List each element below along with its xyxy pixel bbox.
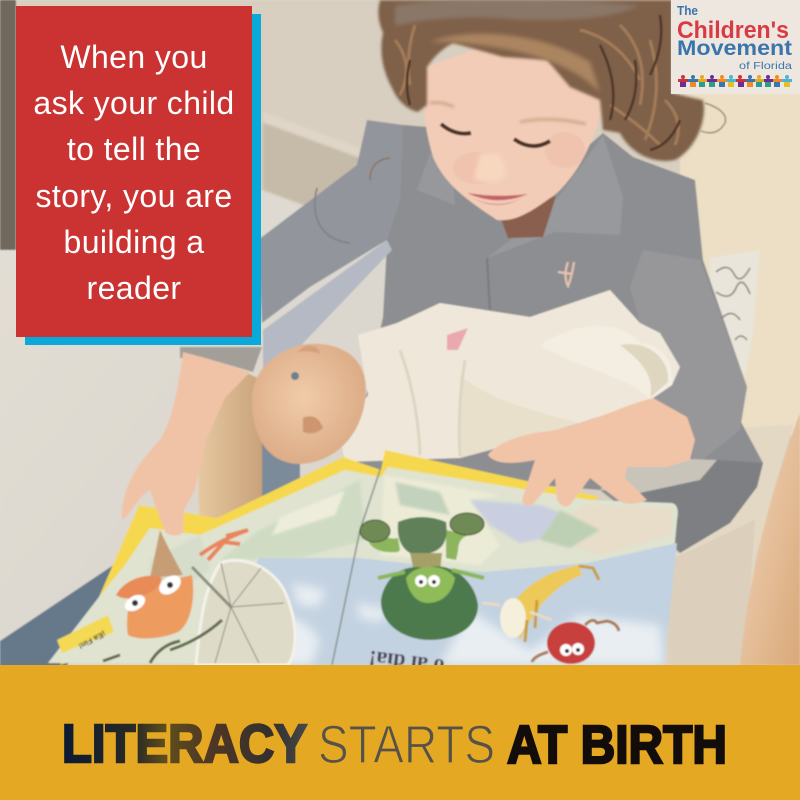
right sleeve highlight (630, 250, 747, 470)
left sleeve (258, 120, 403, 323)
carrot character (103, 530, 248, 663)
small sign: ¡Ea Fin! (77, 629, 107, 651)
hair (378, 0, 704, 161)
red panel with quote: to tell the (67, 131, 201, 167)
red panel with quote: When you (60, 39, 208, 75)
doll head (252, 344, 366, 464)
child: left arm and hand (122, 352, 250, 536)
broccoli character (378, 566, 484, 640)
face (424, 40, 603, 220)
logo: The Children's Movement of Florida: The (677, 3, 698, 18)
chair arm strip (263, 240, 392, 372)
child: grey dress (180, 120, 763, 553)
red panel with quote: story, you are (35, 178, 233, 214)
small sign (57, 615, 114, 653)
child: head, face and hair (370, 0, 726, 238)
placket and collars (417, 153, 455, 205)
book pages (48, 467, 678, 665)
callout: quote box (16, 6, 261, 345)
doll wrapped in blanket (252, 290, 680, 464)
bottom banner background (0, 665, 800, 800)
map texture (150, 475, 672, 610)
red panel with quote: building a (64, 224, 204, 260)
sky section (200, 543, 677, 665)
parachute (192, 560, 295, 665)
logo: The Children's Movement of Florida (671, 0, 800, 94)
blanket (340, 290, 680, 462)
book yellow cover edges (60, 450, 600, 665)
red panel with quote (16, 6, 252, 337)
banner title: Literacy Starts at Birth (62, 714, 727, 775)
chair: cushions, pillow and wood arm (198, 90, 800, 665)
banner title: Literacy Starts at Birth: STARTS (318, 715, 495, 775)
banana character (482, 565, 599, 642)
child: right forearm and hand (488, 398, 695, 507)
tomato character (532, 620, 619, 664)
banner title: Literacy Starts at Birth: AT BIRTH (507, 715, 727, 775)
red panel with quote: ask your child (33, 85, 235, 121)
picture book (48, 450, 678, 680)
logo: The Children's Movement of Florida: of Florida (739, 61, 793, 72)
lower skirt (600, 457, 717, 493)
banner title: Literacy Starts at Birth: LITERACY (62, 714, 307, 774)
logo: The Children's Movement of Florida: Movement (677, 37, 792, 60)
lower sleeve under quote box (180, 347, 262, 372)
red panel with quote: reader (87, 270, 181, 306)
frog character (360, 513, 484, 572)
upside-down caption: o al dia! (367, 646, 446, 680)
neck shadow (500, 196, 556, 238)
blue shadow panel (25, 14, 261, 345)
logo: The Children's Movement of Florida: Children's (677, 17, 789, 44)
row of paper-chain children (678, 75, 792, 87)
